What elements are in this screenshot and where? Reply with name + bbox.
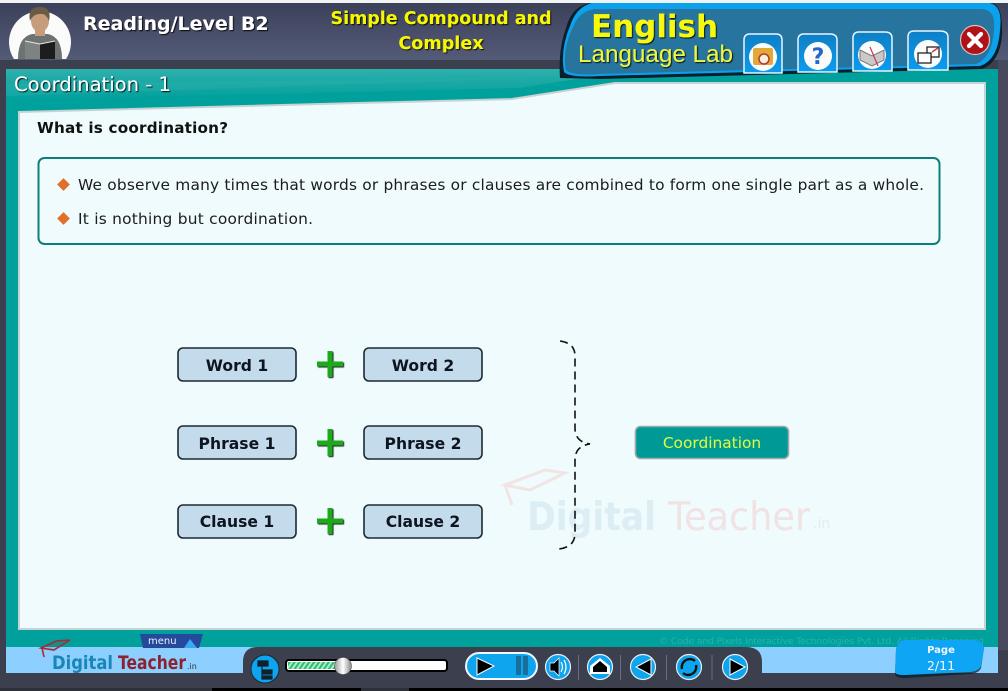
heading: topic title: Simple Compound and: [330, 9, 552, 29]
icon tab: help: ?: [812, 45, 824, 70]
heading: topic title: Complex: [398, 34, 484, 54]
footer light bar: [6, 647, 998, 673]
heading: level: Reading/Level B2: [83, 13, 269, 35]
page indicator: Page: [927, 645, 955, 656]
diagram: word row: [178, 348, 482, 381]
diagram: word row: Word 1: [206, 357, 268, 375]
heading: Language Lab: Language Lab: [578, 41, 733, 68]
callout: definition box: [38, 158, 940, 244]
page indicator: 2/11: [927, 658, 955, 673]
watermark logo: [505, 470, 830, 540]
blue english language lab panel: [560, 3, 1002, 79]
icon: reader avatar: [9, 7, 71, 59]
result box: coordination: [636, 426, 788, 458]
icon: close button: [960, 26, 990, 54]
icon tab: windows: [908, 31, 948, 70]
digital teacher logo: [41, 640, 197, 674]
watermark logo: .in: [813, 516, 830, 532]
diagram: word row: Word 2: [392, 357, 454, 375]
heading: topic title: [330, 9, 552, 54]
diagram: phrase row: [178, 426, 482, 459]
menu tab: [140, 634, 203, 648]
header bar: [0, 3, 1008, 60]
bullet 1: We observe many times that words or phrases or clauses are combined to form one single part as a whole.: [78, 176, 924, 194]
content panel: [19, 83, 985, 629]
digital teacher logo: .in: [187, 662, 197, 671]
bottom edge strip: [0, 688, 1008, 691]
icon: replay: [676, 654, 702, 680]
digital teacher logo: Digital: [52, 652, 113, 674]
result box: coordination: Coordination: [663, 434, 761, 452]
watermark logo: Teacher: [667, 495, 811, 540]
icon: previous: [630, 654, 656, 680]
diagram: clause row: [178, 505, 482, 538]
icon: next: [722, 654, 748, 680]
diagram: dashed brace: [559, 341, 590, 549]
control separators: [578, 655, 712, 680]
control bar: [243, 647, 762, 688]
copyright: © Code and Pixels Interactive Technologies Pvt. Ltd. All Rights Reserved: [659, 636, 984, 647]
diagram: clause row: Clause 2: [386, 513, 460, 531]
icon: home: [588, 654, 612, 680]
diagram: phrase row: Phrase 1: [199, 435, 275, 453]
watermark logo: Digital: [527, 495, 656, 540]
icon: tree menu: [251, 655, 279, 683]
diagram: phrase row: Phrase 2: [385, 435, 461, 453]
diagram: clause row: Clause 1: [200, 513, 274, 531]
icon tab: folder clock: [744, 34, 782, 73]
text: question heading: What is coordination?: [37, 119, 228, 137]
digital teacher logo: Teacher: [118, 652, 187, 674]
progress slider: [286, 658, 447, 674]
icon: sound: [546, 654, 570, 680]
menu tab: menu: [148, 636, 177, 647]
icon tab: book: [853, 32, 892, 71]
heading: English: English: [591, 9, 718, 45]
icon tab: help: [798, 34, 837, 72]
heading: section title: Coordination - 1: [14, 73, 171, 96]
play and pause control: [466, 653, 537, 679]
bullet 2: It is nothing but coordination.: [78, 210, 313, 228]
page indicator: [895, 640, 984, 678]
